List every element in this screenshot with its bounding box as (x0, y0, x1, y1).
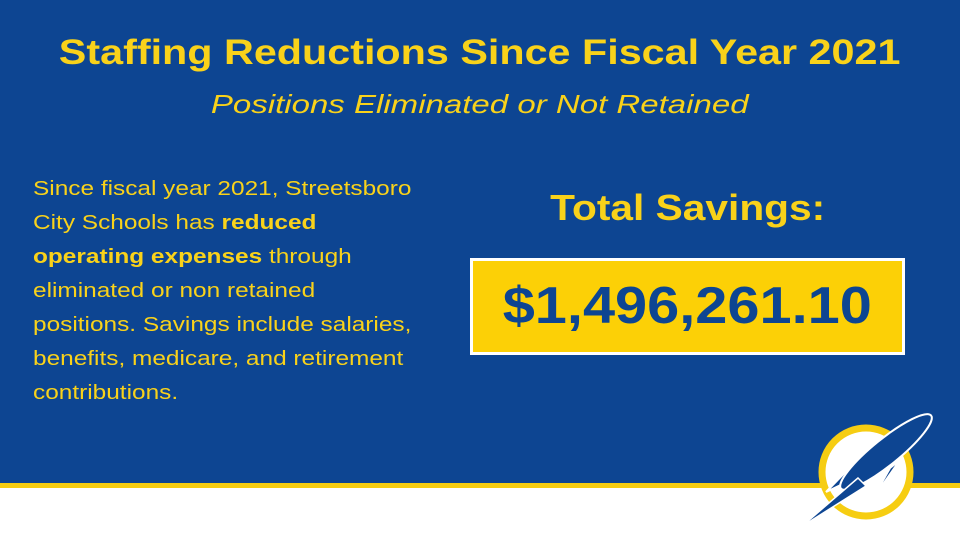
body text: contributions. (33, 382, 178, 404)
body text (33, 178, 411, 404)
body text: operating expenses through (33, 246, 352, 268)
savings amount box (470, 258, 905, 355)
body text: Since fiscal year 2021, Streetsboro (33, 178, 411, 200)
savings amount box: $1,496,261.10 (503, 277, 872, 335)
body text: positions. Savings include salaries, (33, 314, 411, 336)
title: Staffing Reductions Since Fiscal Year 2021 (59, 33, 901, 72)
body text: eliminated or non retained (33, 280, 315, 302)
total savings heading: Total Savings: (550, 187, 825, 228)
body text: benefits, medicare, and retirement (33, 348, 403, 370)
subtitle: Positions Eliminated or Not Retained (211, 89, 749, 119)
icon: rocket logo (810, 413, 933, 521)
body text: City Schools has reduced (33, 212, 316, 234)
